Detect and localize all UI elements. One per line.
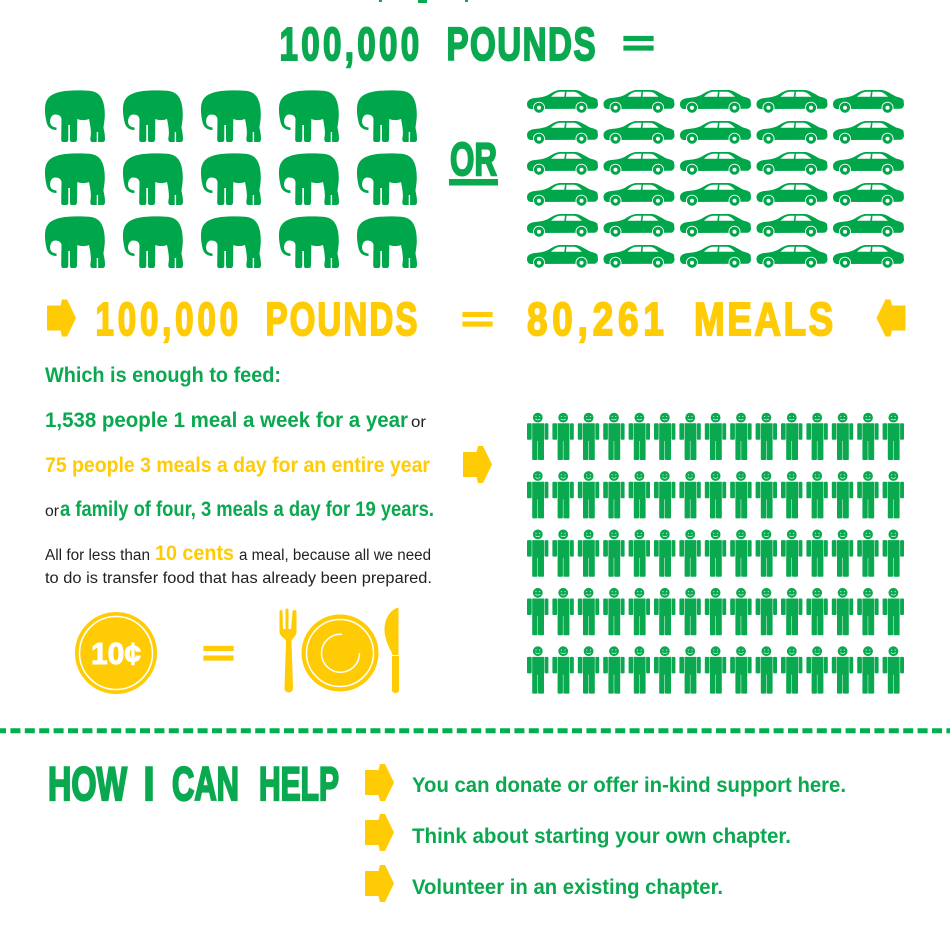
OR label with underline: [449, 133, 498, 186]
icon grid: thirty cars: [527, 90, 904, 269]
heading: how I can help: HELP: [259, 757, 339, 810]
equation: 100,000 pounds = 80,261 meals: 80,261: [527, 293, 664, 345]
heading: how I can help: [48, 757, 339, 810]
equals sign between coin and meal: =: [202, 632, 235, 673]
OR label with underline: OR: [450, 133, 497, 185]
title: 100,000 pounds equals: POUNDS: [446, 20, 596, 70]
text: 75 people: 75 people 3 meals a day for an entire year: [45, 454, 430, 477]
action: start a chapter: [365, 814, 791, 851]
action: start a chapter: Think about starting your own chapter.: [412, 825, 791, 848]
icon: ten cent coin: [75, 612, 157, 694]
text: all for less than 10 cents: All for less than: [45, 547, 150, 564]
arrow: right-pointing left of the equation: [47, 300, 76, 336]
action: volunteer: [365, 865, 723, 902]
text: 1,538 people: 1,538 people 1 meal a week for a year: [45, 409, 408, 432]
action: donate: You can donate or offer in-kind support here.: [412, 774, 846, 797]
icon grid: fifteen elephants: [45, 90, 417, 268]
title: 100,000 pounds equals: [280, 20, 655, 70]
equation: 100,000 pounds = 80,261 meals: =: [461, 298, 494, 339]
equation: 100,000 pounds = 80,261 meals: [96, 293, 833, 345]
text: all for less than 10 cents: to do is transfer food that has already been prepared.: [45, 570, 432, 587]
text: all for less than 10 cents: [45, 542, 432, 587]
text: family of four: a family of four, 3 meals a day for 19 years.: [60, 498, 434, 521]
heading: how I can help: CAN: [172, 757, 239, 810]
equation: 100,000 pounds = 80,261 meals: MEALS: [694, 293, 833, 345]
text: all for less than 10 cents: 10 cents: [155, 542, 234, 565]
icon grid: seventy-five people: [527, 413, 904, 694]
equation: 100,000 pounds = 80,261 meals: 100,000: [96, 295, 238, 345]
arrow: toward people grid: [463, 446, 492, 483]
text: all for less than 10 cents: a meal, because all we need: [239, 547, 431, 564]
title: 100,000 pounds equals: 100,000: [280, 20, 419, 70]
equation: 100,000 pounds = 80,261 meals: POUNDS: [266, 295, 417, 345]
title: 100,000 pounds equals: =: [622, 22, 655, 63]
text: which is enough to feed: Which is enough to feed:: [45, 364, 281, 387]
icon: fork, plate and knife: [280, 608, 399, 693]
arrow: left-pointing right of the equation: [876, 300, 906, 336]
text: family of four: or: [45, 503, 59, 520]
heading: how I can help: I: [144, 757, 154, 810]
action: volunteer: Volunteer in an existing chapter.: [412, 876, 723, 899]
action: donate: [365, 764, 846, 801]
text: 1,538 people: or: [411, 414, 426, 431]
icon: ten cent coin: 10¢: [91, 636, 141, 671]
cropped text fragments at top edge: [379, 0, 468, 3]
heading: how I can help: HOW: [48, 757, 127, 810]
